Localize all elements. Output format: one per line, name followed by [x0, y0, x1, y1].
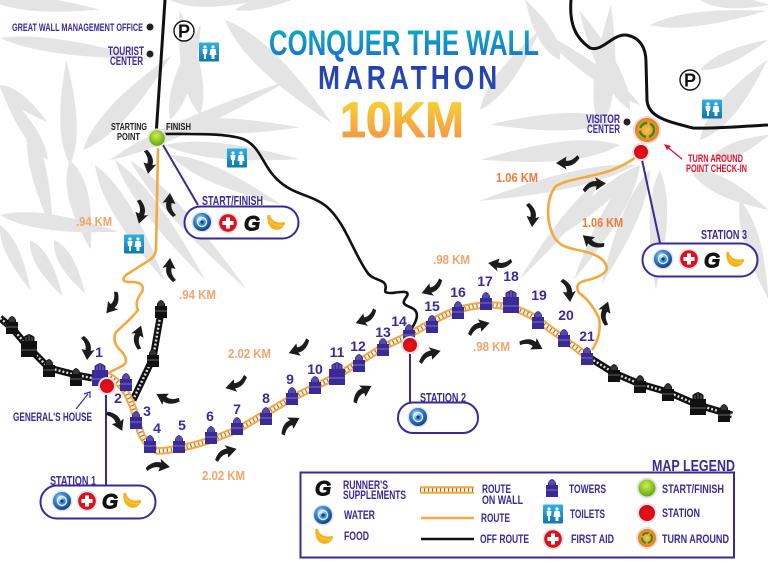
place labels: [12, 22, 620, 424]
tower numbers: 10: [307, 361, 323, 377]
distance labels: .98 KM: [433, 252, 470, 267]
tower numbers: 4: [153, 420, 161, 436]
distance labels: 2.02 KM: [202, 468, 245, 483]
route: orange west: [108, 148, 158, 373]
tower numbers: 17: [477, 273, 493, 289]
start and finish labels: [111, 121, 191, 143]
distance labels: 2.02 KM: [228, 346, 271, 361]
distance labels: 1.06 KM: [582, 215, 623, 230]
panel: station 1: STATION 1: [50, 473, 96, 488]
title: CONQUER THE WALL: [269, 24, 539, 63]
panel: station 3: STATION 3: [701, 227, 747, 242]
panel: start/finish station: [184, 193, 298, 238]
place labels: GREAT WALL MANAGEMENT OFFICE: [12, 22, 143, 34]
panel: map legend: G: [315, 478, 331, 500]
panel: station 1: [40, 473, 156, 518]
parking: west: P: [178, 22, 190, 42]
route: orange east: [548, 154, 640, 350]
tower numbers: 11: [330, 344, 345, 360]
tower numbers: 8: [262, 390, 270, 406]
panel: map legend: [300, 458, 735, 558]
panel: map legend: TOWERS: [569, 482, 606, 496]
tower numbers: 3: [143, 403, 151, 419]
panel: station 2: STATION 2: [420, 390, 466, 405]
panel: map legend: TURN AROUND: [662, 532, 729, 546]
panel: map legend: SUPPLEMENTS: [343, 488, 406, 502]
distance labels: [76, 170, 623, 483]
black wall sections: [0, 312, 732, 415]
tower numbers: 9: [286, 371, 294, 387]
tower numbers: 1: [95, 344, 103, 360]
parking: west: [174, 21, 194, 42]
tower numbers: 13: [375, 324, 391, 340]
panel: station 2: [398, 390, 478, 433]
distance labels: .98 KM: [473, 339, 510, 354]
tower numbers: 12: [350, 338, 366, 354]
tower numbers: 20: [558, 307, 574, 323]
panel: map legend: ROUTE: [481, 511, 510, 525]
place labels: VISITOR: [586, 112, 620, 126]
tower numbers: 18: [503, 268, 519, 284]
tower numbers: 19: [531, 287, 547, 303]
title: [269, 24, 539, 148]
tower numbers: 14: [391, 313, 407, 329]
distance labels: .94 KM: [76, 214, 112, 229]
off route: black road east: [571, 0, 767, 128]
tower numbers: [95, 268, 595, 436]
direction arrows: [81, 149, 614, 473]
start and finish labels: POINT: [117, 131, 140, 143]
tower numbers: 21: [579, 328, 595, 344]
distance labels: 1.06 KM: [496, 170, 538, 185]
start and finish labels: FINISH: [166, 121, 191, 133]
panel: map legend: RUNNER'S: [343, 478, 388, 492]
place labels: CENTER: [110, 54, 143, 68]
start and finish labels: STARTING: [111, 121, 147, 133]
distance labels: .94 KM: [179, 287, 216, 302]
tower numbers: 7: [233, 401, 241, 417]
tower numbers: 16: [450, 284, 466, 300]
place labels: GENERAL'S HOUSE: [13, 410, 92, 424]
panel: map legend: START/FINISH: [662, 482, 724, 496]
panel: map legend: FOOD: [344, 529, 369, 543]
turn around callout: TURN AROUND: [688, 153, 743, 165]
panel: map legend: MAP LEGEND: [652, 458, 735, 475]
tower numbers: 6: [206, 408, 214, 424]
panel: station 1: G: [102, 490, 118, 514]
place labels: CENTER: [587, 122, 620, 136]
toilets icons: [124, 42, 722, 254]
general's house arrow: [76, 392, 90, 409]
tower numbers: 5: [178, 417, 186, 433]
title: 10KM: [340, 92, 464, 148]
tower numbers: 15: [424, 298, 440, 314]
panel: map legend: OFF ROUTE: [480, 532, 529, 546]
turn around callout: [664, 144, 747, 175]
panel: station 3: [642, 227, 758, 276]
tower numbers: 2: [114, 390, 122, 406]
parking: east: P: [684, 70, 696, 90]
place dots: [146, 24, 630, 126]
panel: station 3: G: [704, 250, 720, 272]
off route: black road west: [156, 0, 417, 328]
route on wall: [107, 305, 587, 451]
place labels: TOURIST: [108, 44, 144, 58]
panel: map legend: ROUTE: [482, 482, 511, 496]
title: MARATHON: [318, 60, 497, 97]
parking: east: [680, 70, 700, 90]
panel: map legend: WATER: [344, 508, 375, 522]
panel: map legend: TOILETS: [570, 507, 605, 521]
map markers: [98, 116, 661, 395]
purple towers: [92, 290, 593, 453]
background: bamboo leaves: [0, 0, 768, 302]
panel: map legend: FIRST AID: [571, 532, 614, 546]
panel: start/finish station: G: [244, 212, 260, 236]
panel: start/finish station: START/FINISH: [202, 193, 263, 208]
panel: map legend: ON WALL: [482, 493, 523, 507]
panel: map legend: STATION: [662, 506, 700, 520]
black towers: [6, 300, 730, 422]
station connector lines: [106, 145, 660, 485]
